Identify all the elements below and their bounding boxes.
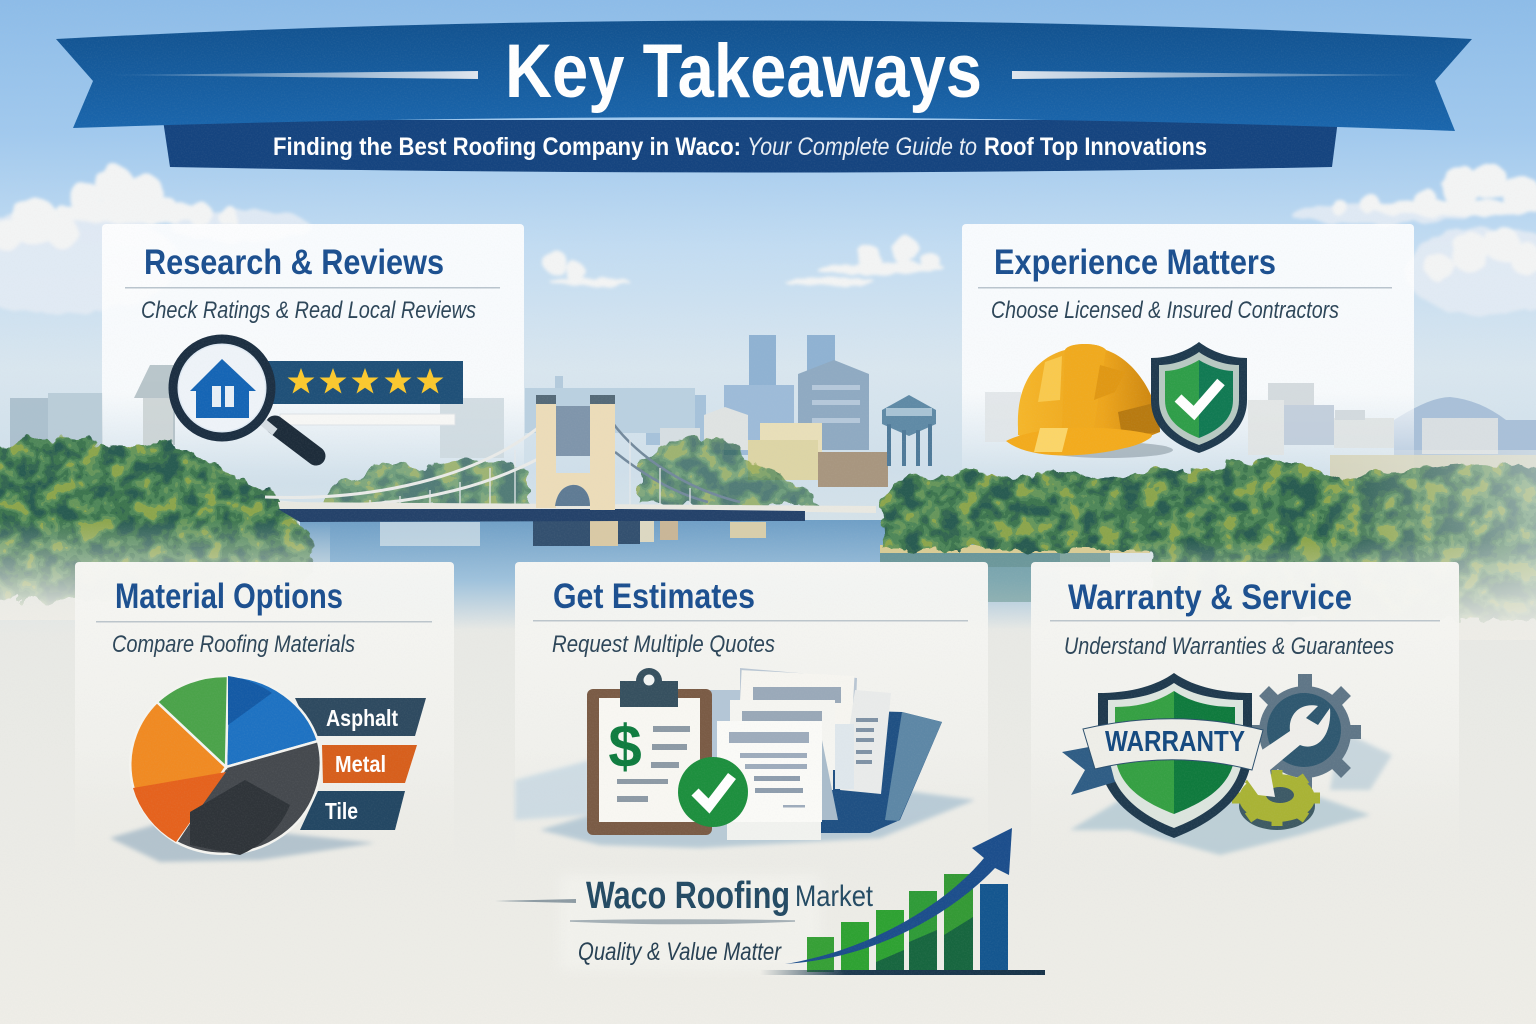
heading: Experience Matters <box>994 243 1276 282</box>
growth arrow <box>785 828 1012 964</box>
icon: rating bar <box>268 361 463 425</box>
panel: material options <box>75 562 454 872</box>
dollar sign: $ <box>608 713 642 780</box>
panel: experience matters <box>962 224 1414 484</box>
water tower <box>882 395 936 466</box>
mid buildings <box>660 407 888 487</box>
label: tile: Tile <box>325 798 358 824</box>
tree lines <box>0 438 1536 640</box>
main cables <box>265 422 593 505</box>
warranty ribbon: WARRANTY <box>1105 726 1245 758</box>
heading: Warranty & Service <box>1068 578 1352 617</box>
suspension bridge <box>265 395 876 546</box>
title: Key Takeaways <box>505 29 982 114</box>
wrench <box>1240 705 1330 797</box>
bridge towers <box>536 395 615 510</box>
pie shadow <box>110 820 375 862</box>
card background <box>1031 562 1459 872</box>
icon: green check badge <box>678 757 748 827</box>
label: asphalt: Asphalt <box>326 705 398 731</box>
main banner <box>56 20 1472 131</box>
subtitle ribbon: Finding the Best Roofing Company in Waco: <box>273 133 741 161</box>
baseline <box>760 970 1045 975</box>
clouds <box>0 164 1536 316</box>
panel: warranty & service <box>1031 562 1459 872</box>
front document <box>717 721 822 822</box>
card background <box>515 562 988 872</box>
heading: Material Options <box>115 577 343 616</box>
panel: get estimates <box>515 562 988 872</box>
left haze buildings <box>10 393 103 458</box>
ghost buildings behind icons <box>985 383 1394 455</box>
subheading: Request Multiple Quotes <box>552 631 775 658</box>
subtitle ribbon: Roof Top Innovations <box>984 133 1207 161</box>
bridge deck <box>278 502 876 513</box>
right hill and haze <box>1394 397 1536 455</box>
heading: Research & Reviews <box>144 243 444 282</box>
icon: stacked documents <box>717 668 891 840</box>
subheading: Check Ratings & Read Local Reviews <box>141 297 476 324</box>
icon: clipboard <box>587 668 712 835</box>
card background <box>102 224 524 484</box>
market trend section <box>495 828 1045 975</box>
left trees <box>0 438 312 600</box>
market subtitle: Quality & Value Matter <box>578 938 782 966</box>
river <box>300 520 1060 630</box>
label: metal: Metal <box>335 751 386 777</box>
pie legend labels <box>295 698 426 830</box>
card background <box>962 224 1414 484</box>
subheading: Choose Licensed & Insured Contractors <box>991 297 1339 324</box>
title banner <box>56 20 1472 172</box>
fade over right trees <box>1320 450 1536 640</box>
pie chart <box>130 676 321 855</box>
market title: Waco Roofing <box>586 875 790 917</box>
market title: Market <box>795 880 874 913</box>
subheading: Compare Roofing Materials <box>112 631 355 658</box>
icon: check shield <box>1151 342 1247 453</box>
far hillside band <box>1330 455 1536 490</box>
shadow <box>515 760 590 820</box>
icon: gear with wrench <box>1232 674 1361 830</box>
bridge piers and reflections <box>380 510 766 546</box>
fade over lower trees <box>0 520 1536 640</box>
trees behind bridge <box>325 438 820 505</box>
panel: research & reviews <box>102 224 524 484</box>
hangers <box>340 440 690 508</box>
card background <box>75 562 454 872</box>
subtitle ribbon <box>163 120 1338 172</box>
shadow <box>1070 790 1370 855</box>
right trees <box>880 459 1536 620</box>
icon: warranty shield <box>1098 673 1252 838</box>
icon: ghost house <box>134 365 504 458</box>
downtown towers <box>525 335 869 465</box>
olive gear <box>1232 770 1320 830</box>
subtitle ribbon: Your Complete Guide to <box>747 133 977 161</box>
heading: Get Estimates <box>553 577 755 616</box>
far shore band <box>880 545 1150 602</box>
blue folder behind documents <box>710 690 942 833</box>
warranty ribbon <box>1083 719 1263 770</box>
distant skyline <box>10 335 1536 487</box>
icon: magnifying glass with house <box>173 339 316 456</box>
subheading: Understand Warranties & Guarantees <box>1064 633 1394 660</box>
icon: hard hat <box>1006 344 1173 458</box>
soft backdrop <box>560 875 820 970</box>
ribbon tail <box>1062 744 1115 795</box>
bar chart <box>807 874 1008 972</box>
accent line <box>495 899 576 903</box>
